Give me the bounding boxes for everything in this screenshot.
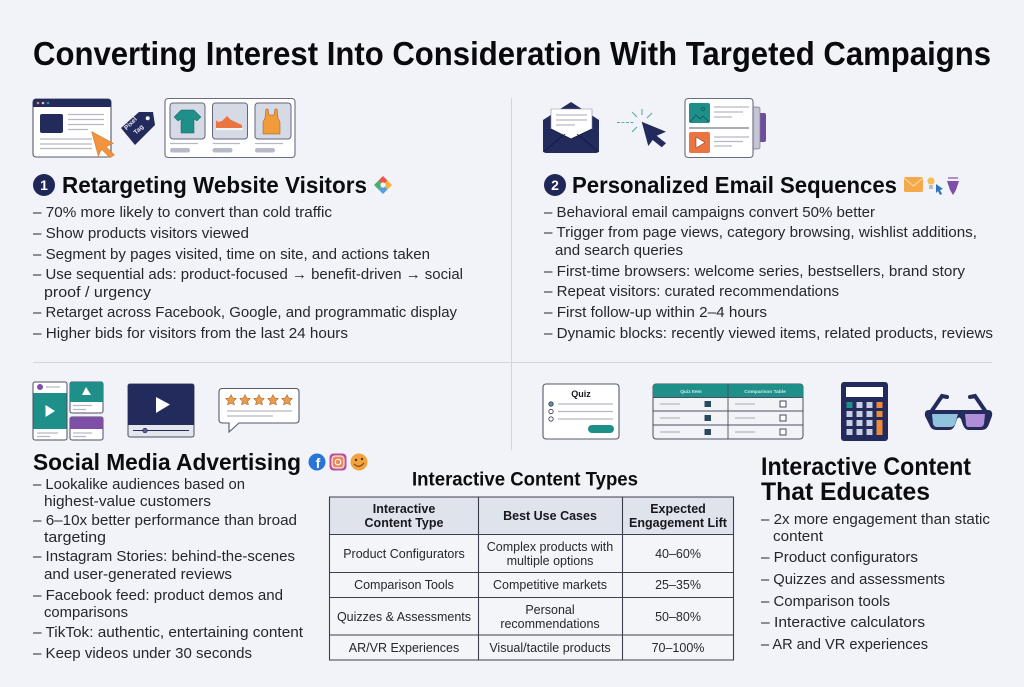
list: social points: comparisons (44, 604, 128, 621)
comparison table: multiple options (507, 554, 593, 568)
icon: review bubble with stars (219, 388, 299, 432)
comparison table: Competitive markets (493, 578, 607, 592)
list: social points: – 6–10x better performance than broad (33, 512, 297, 529)
icon: content documents (685, 98, 766, 158)
comparison table: 70–100% (652, 641, 704, 655)
list: interactive points: – Quizzes and assessments (761, 571, 945, 588)
list: email points: – First-time browsers: welcome series, bestsellers, brand story (544, 263, 966, 280)
list: interactive points: content (773, 528, 824, 545)
list: social points: – Lookalike audiences based on (33, 476, 245, 493)
icon: quiz card: Quiz (571, 389, 591, 399)
comparison table: Interactive (373, 502, 435, 516)
icon: comparison table (653, 384, 803, 439)
icon: pixel tag (121, 112, 155, 145)
comparison table: 25–35% (655, 578, 701, 592)
list: social points: and user-generated reviews (44, 566, 232, 583)
heading: interactive content: That Educates (761, 478, 930, 506)
icon: AR/VR glasses (925, 396, 992, 430)
icon: comparison table: Quiz Item (680, 389, 702, 395)
list: retargeting points: – Show products visitors viewed (33, 225, 249, 242)
table heading: Interactive Content Types (412, 470, 638, 490)
comparison table: Visual/tactile products (489, 641, 611, 655)
list: email points: – Trigger from page views, category browsing, wishlist additions, (544, 224, 977, 241)
comparison table: AR/VR Experiences (349, 641, 459, 655)
icon: social post cards (33, 382, 103, 440)
icon: pixel tag: Tag (133, 124, 145, 136)
list: retargeting points: – Higher bids for visitors from the last 24 hours (33, 325, 348, 342)
heading: email sequences: 2 (551, 177, 559, 193)
list: social points: – Keep videos under 30 seconds (33, 645, 252, 662)
list: social points: highest-value customers (44, 493, 211, 510)
list: retargeting points: – Use sequential ads: product-focused → benefit-driven → social (33, 266, 463, 283)
heading: interactive content: Interactive Content (761, 453, 972, 481)
comparison table: 40–60% (655, 547, 701, 561)
panel: interactive content types table (330, 470, 734, 660)
list: social points (33, 476, 304, 662)
list: retargeting points: – Segment by pages visited, time on site, and actions taken (33, 246, 430, 263)
list: interactive points: – Interactive calculators (761, 614, 925, 631)
panel: retargeting website visitors (33, 98, 463, 342)
panel: social media advertising (33, 382, 368, 662)
comparison table: recommendations (500, 617, 600, 631)
heading: retargeting: 1 (40, 177, 48, 193)
comparison table: Quizzes & Assessments (337, 610, 471, 624)
list: social points: – TikTok: authentic, entertaining content (33, 624, 304, 641)
comparison table: Best Use Cases (503, 509, 597, 523)
list: interactive points: – Comparison tools (761, 593, 890, 610)
list: retargeting points: proof / urgency (44, 284, 152, 301)
comparison table: Personal (525, 603, 575, 617)
heading: interactive content (761, 453, 972, 506)
list: interactive points: – AR and VR experiences (761, 636, 928, 653)
list: interactive points: – 2x more engagement than static (761, 511, 990, 528)
comparison table: 50–80% (655, 610, 701, 624)
list: interactive points: – Product configurators (761, 549, 918, 566)
panel: interactive content that educates (543, 382, 992, 653)
icon: calculator (841, 382, 888, 441)
comparison table: Expected (650, 502, 706, 516)
title: Converting Interest Into Consideration With Targeted Campaigns (33, 35, 991, 72)
icon: open envelope (543, 102, 599, 153)
list: social points: targeting (44, 529, 106, 546)
heading: social media: f (316, 455, 321, 471)
icon: pixel tag: Pixel (123, 116, 139, 132)
icon: quiz card (543, 384, 619, 439)
list: email points: – Dynamic blocks: recently viewed items, related products, reviews (544, 325, 993, 342)
comparison table: Comparison Tools (354, 578, 454, 592)
comparison table: Complex products with (487, 540, 613, 554)
icon: browser with cursor (33, 99, 114, 158)
list: retargeting points: – 70% more likely to convert than cold traffic (33, 204, 333, 221)
list: social points: – Instagram Stories: behind-the-scenes (33, 548, 295, 565)
comparison table (330, 497, 734, 660)
list: email points: – First follow-up within 2–4 hours (544, 304, 767, 321)
icon: video player (128, 384, 194, 437)
heading: retargeting: Retargeting Website Visitors (62, 172, 367, 198)
icon: click cursor (617, 109, 666, 147)
list: email points: – Repeat visitors: curated recommendations (544, 283, 839, 300)
list: email points: – Behavioral email campaigns convert 50% better (544, 204, 875, 221)
list: retargeting points: – Retarget across Facebook, Google, and programmatic display (33, 304, 457, 321)
list: social points: – Facebook feed: product demos and (33, 587, 283, 604)
list: interactive points (761, 511, 990, 653)
list: email points: and search queries (555, 242, 683, 259)
list: email points (544, 204, 993, 342)
list: retargeting points (33, 204, 463, 342)
heading: email sequences: Personalized Email Sequences (572, 172, 897, 198)
icon: comparison table: Comparison Table (744, 389, 786, 395)
comparison table: Product Configurators (343, 547, 465, 561)
heading: social media: Social Media Advertising (33, 449, 301, 475)
comparison table: Content Type (365, 516, 444, 530)
panel: personalized email sequences (543, 98, 993, 342)
comparison table: Engagement Lift (629, 516, 728, 530)
icon: viewed products (165, 98, 295, 158)
